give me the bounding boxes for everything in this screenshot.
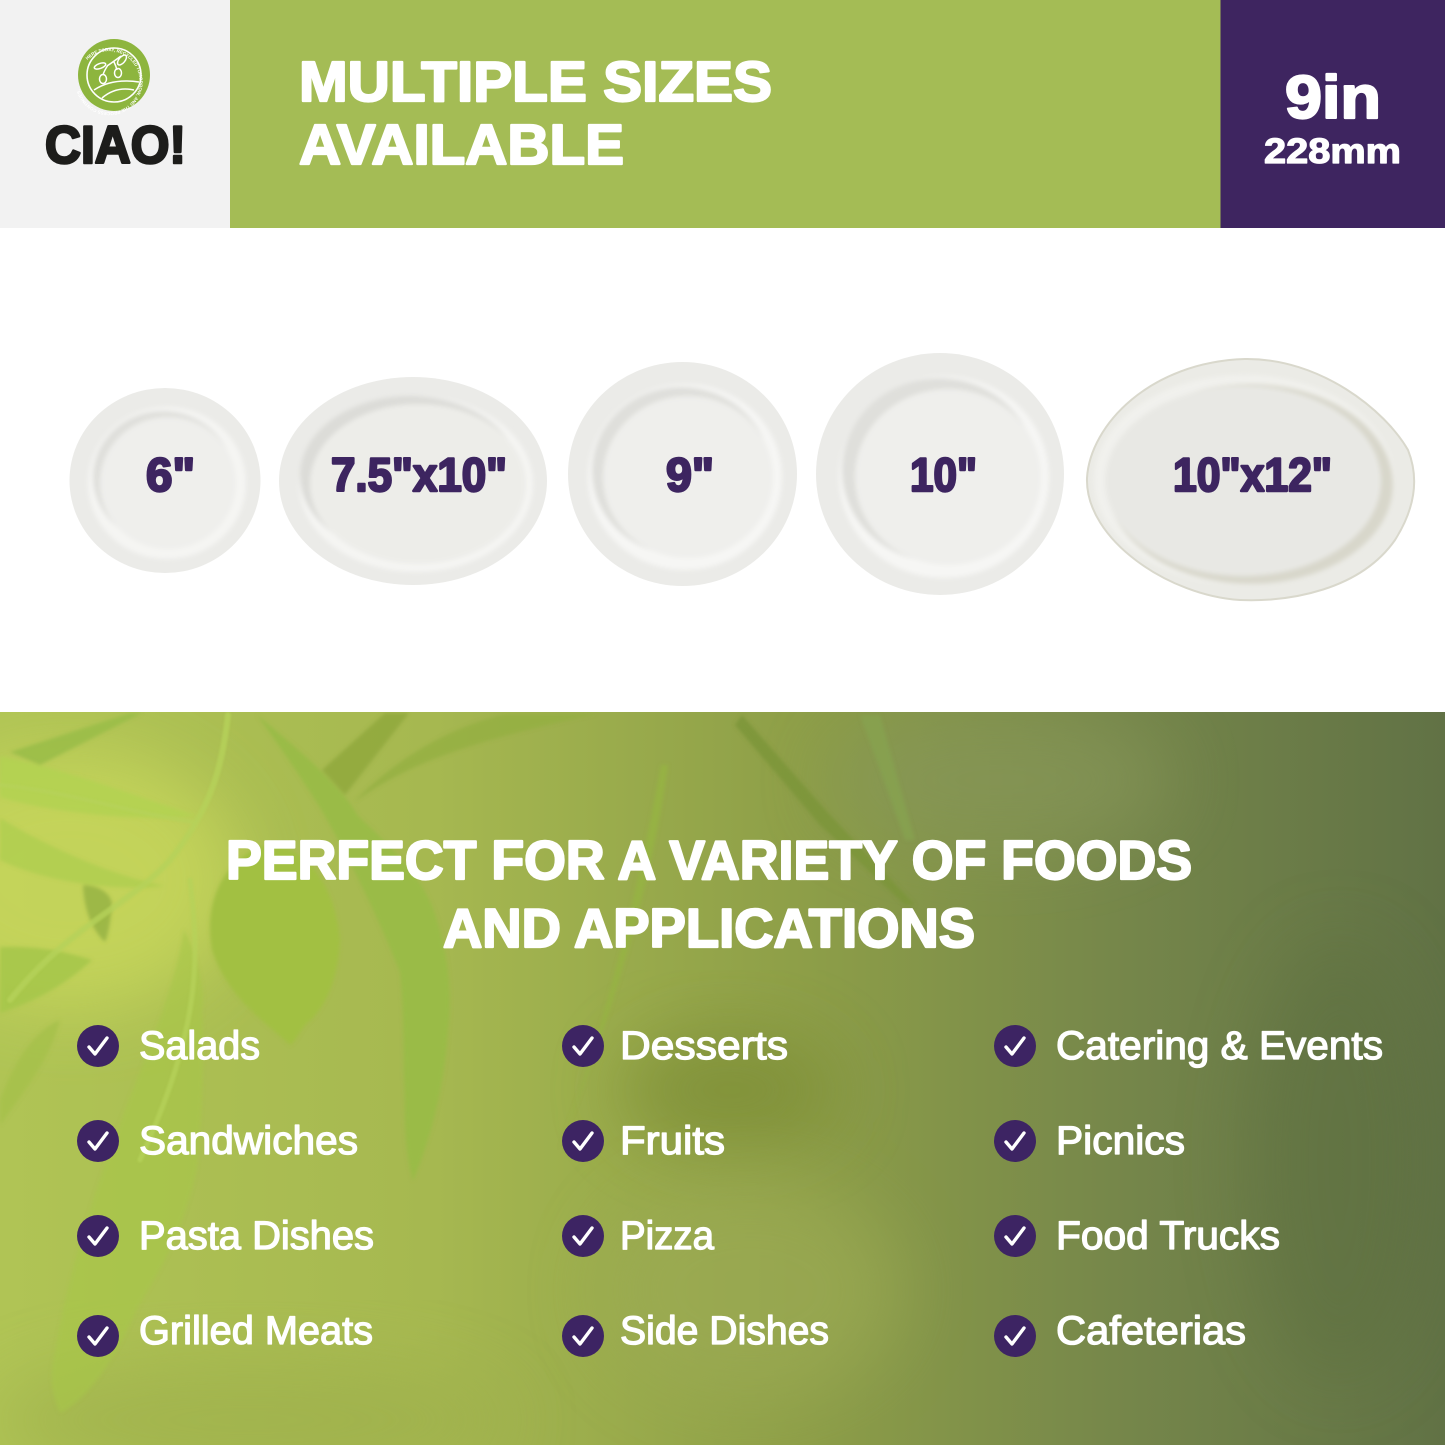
item: Fruits <box>562 1119 725 1163</box>
item: Sandwiches: Sandwiches <box>139 1119 358 1163</box>
item: Pasta Dishes: Pasta Dishes <box>139 1214 374 1258</box>
header band <box>230 0 1221 228</box>
item: Cafeterias <box>994 1309 1246 1357</box>
section heading: AND APPLICATIONS <box>443 897 975 959</box>
item: Food Trucks: Food Trucks <box>1056 1214 1280 1258</box>
white plates section <box>0 228 1445 712</box>
section heading <box>226 829 1192 959</box>
plate: 6 inch <box>70 388 260 573</box>
list column: applications <box>994 1024 1383 1357</box>
section heading: PERFECT FOR A VARIETY OF FOODS <box>226 829 1192 891</box>
size badge: 9in <box>1285 64 1381 131</box>
plate: 10 x 12 inch <box>1087 359 1414 600</box>
item: Desserts <box>562 1024 788 1068</box>
plate: 10 inch <box>816 353 1064 595</box>
item: Fruits: Fruits <box>620 1119 725 1163</box>
item: Desserts: Desserts <box>620 1024 788 1068</box>
logo wordmark: CIAO! <box>45 116 186 175</box>
green foliage background panel <box>0 710 1445 1445</box>
item: Side Dishes: Side Dishes <box>620 1309 829 1353</box>
plate: 10 inch: 10" <box>910 448 977 501</box>
plate: 10 x 12 inch: 10"x12" <box>1173 448 1332 501</box>
header title: AVAILABLE <box>299 113 624 177</box>
header title: MULTIPLE SIZES <box>299 50 772 114</box>
item: Salads: Salads <box>139 1024 260 1068</box>
item: Cafeterias: Cafeterias <box>1056 1309 1246 1353</box>
list column: foods <box>77 1024 374 1357</box>
item: Picnics <box>994 1119 1185 1163</box>
item: Picnics: Picnics <box>1056 1119 1185 1163</box>
olive fruit <box>210 845 340 1045</box>
item: Pizza: Pizza <box>620 1214 715 1258</box>
item: Pizza <box>562 1214 715 1258</box>
header title <box>299 50 772 177</box>
plate: 6 inch: 6" <box>146 448 195 501</box>
item: Catering & Events: Catering & Events <box>1056 1024 1383 1068</box>
plate: 7.5 x 10 inch <box>279 377 547 585</box>
plate: 9 inch: 9" <box>666 448 714 501</box>
list column: more foods <box>562 1024 829 1357</box>
logo emblem: HERE TODAY, RECYCLED TOMORROW, AND THE PROCESS CONTINUES. <box>77 48 143 115</box>
size badge: 228mm <box>1264 132 1401 171</box>
item: Grilled Meats: Grilled Meats <box>139 1309 373 1353</box>
item: Salads <box>77 1024 260 1068</box>
plate: 7.5 x 10 inch: 7.5"x10" <box>331 448 507 501</box>
plate: 9 inch <box>568 362 797 586</box>
logo panel <box>0 0 230 228</box>
size badge <box>1220 0 1445 228</box>
